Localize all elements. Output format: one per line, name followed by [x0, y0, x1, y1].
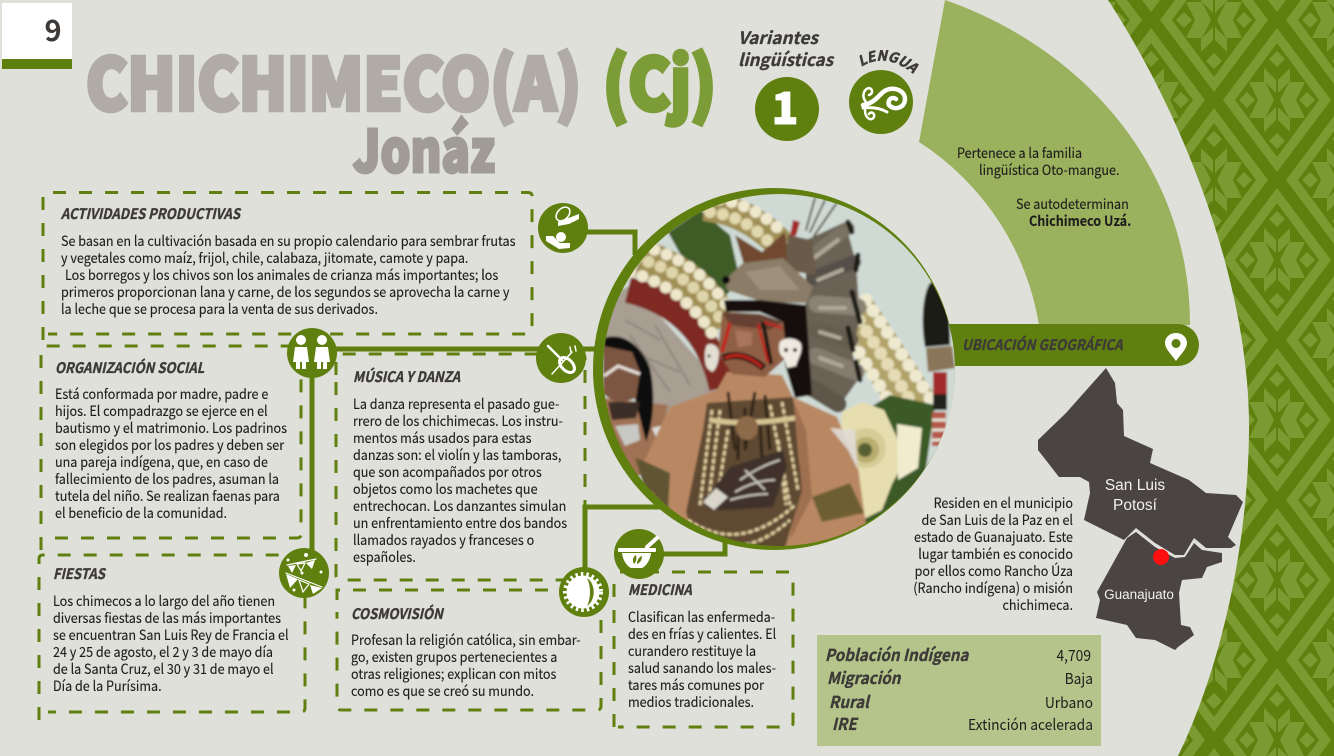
feathers [805, 198, 860, 408]
text block: rrero de los chichimecas. Los instru- [353, 410, 563, 430]
text block: de la Santa Cruz, el 30 y 31 de mayo el [53, 658, 274, 678]
language icon [849, 50, 919, 134]
stone wall [604, 286, 718, 416]
statistics box: Población Indígena [825, 642, 970, 666]
text block [55, 383, 287, 522]
text block: La danza representa el pasado gue- [353, 393, 559, 413]
page number tab: 9 [44, 8, 62, 50]
text block: como es que se creó su mundo. [351, 680, 534, 700]
text block [353, 393, 567, 566]
location marker [1153, 549, 1169, 565]
bead bib [686, 392, 802, 548]
text block: se encuentran San Luis Rey de Francia el [53, 624, 289, 644]
text block: bautismo y el matrimonio. Los padrinos [55, 417, 287, 437]
hair [724, 300, 812, 398]
language family text: lingüística Oto-mangue. [979, 159, 1119, 179]
panel: organización social [41, 328, 337, 550]
text block: Los chimecos a lo largo del año tienen [53, 590, 275, 610]
statistics box [817, 635, 1101, 746]
right corn column [852, 293, 934, 406]
icon: violin [536, 333, 586, 383]
corn arch [630, 246, 734, 340]
central dancer torso [640, 372, 866, 550]
geographic location bar: UBICACIÓN GEOGRÁFICA [962, 334, 1123, 355]
text block [351, 629, 581, 700]
heading: MEDICINA [628, 578, 692, 599]
page number tab [2, 3, 72, 69]
panel: medicina [614, 529, 793, 727]
text block [53, 590, 289, 695]
text block: una pareja indígena, que, en caso de [55, 451, 268, 471]
icon: mortar and pestle [614, 529, 664, 579]
text block [61, 230, 515, 318]
left dancer [603, 335, 668, 492]
linguistic variants [738, 24, 835, 141]
language family text [957, 142, 1131, 230]
location text: (Rancho indígena) o misión [913, 577, 1073, 597]
heading: FIESTAS [53, 562, 106, 583]
text block: el beneficio de la comunidad. [55, 502, 227, 522]
location text [913, 492, 1073, 614]
upper corn [704, 198, 786, 250]
location text: chichimeca. [1003, 594, 1073, 614]
icon: hands with crops [538, 203, 588, 253]
text block: curandero restituye la [628, 640, 756, 660]
connector lines [312, 232, 725, 575]
text block: go, existen grupos pertenecientes a [351, 646, 557, 666]
statistics box: 4,709 [1057, 644, 1091, 666]
language icon: LENGUA [859, 50, 919, 74]
text block: otras religiones; explican con mitos [351, 663, 556, 683]
text block: 24 y 25 de agosto, el 2 y 3 de mayo día [53, 641, 273, 661]
text block: danzas son: el violín y las tamboras, [353, 444, 561, 464]
heading: ACTIVIDADES PRODUCTIVAS [60, 202, 241, 223]
icon: sun and moon [559, 567, 609, 617]
statistics box: Rural [829, 689, 871, 713]
statistics box: IRE [832, 711, 859, 735]
map: San Luis Potosí and Guanajuato [1038, 368, 1243, 650]
text block: tares más comunes por [628, 674, 765, 694]
linguistic variants: Variantes [738, 24, 820, 49]
state labels [1104, 477, 1174, 602]
panel: actividades productivas [43, 192, 588, 340]
text block: medios tradicionales. [628, 691, 754, 711]
icon: two people [287, 328, 337, 378]
location text: de San Luis de la Paz en el [922, 509, 1073, 529]
eagle breastplate [703, 450, 787, 510]
title: Jonáz [353, 105, 495, 189]
text block: Está conformada por madre, padre e [55, 383, 268, 403]
statistics box: Baja [1065, 667, 1093, 689]
language family text: Pertenece a la familia [957, 142, 1082, 162]
location text: lugar también es conocido [918, 543, 1073, 563]
statistics box: Migración [827, 665, 901, 689]
text block: Se basan en la cultivación basada en su propio calendario para sembrar frutas [61, 230, 515, 250]
text block: Profesan la religión católica, sin embar- [351, 629, 581, 649]
text block: objetos como los machetes que [353, 478, 538, 498]
text block: entrechocan. Los danzantes simulan [353, 495, 566, 515]
state labels: Guanajuato [1104, 587, 1174, 602]
location text: Residen en el municipio [934, 492, 1073, 512]
staff at right [923, 282, 955, 446]
heading: ORGANIZACIÓN SOCIAL [55, 356, 204, 377]
face [718, 312, 787, 377]
heading: COSMOVISIÓN [351, 602, 444, 623]
panel: fiestas [39, 548, 329, 720]
title: CHICHIMECO(A) [86, 29, 581, 131]
woven textile pattern panel [1108, 0, 1334, 756]
title: (Cj) [603, 29, 716, 131]
text block: primeros proporcionan lana y carne, de los segundos se aprovecha la carne y [61, 281, 510, 301]
statistics box: Extinción acelerada [968, 713, 1093, 735]
text block: diversas fiestas de las más importantes [53, 607, 281, 627]
text block: mentos más usados para estas [353, 427, 531, 447]
text block: fallecimiento de los padres, asuman la [55, 468, 279, 488]
text block: Clasifican las enfermeda- [628, 606, 775, 626]
geographic location bar [940, 324, 1199, 366]
text block: llamados rayados y franceses o [353, 529, 534, 549]
moss [668, 210, 740, 300]
arm bands [812, 483, 864, 522]
red arch [628, 290, 722, 388]
text block: Los borregos y los chivos son los animales de crianza más importantes; los [65, 264, 498, 284]
panel: cosmovisión [337, 567, 609, 710]
icon: party banners [279, 548, 329, 598]
skull earrings [705, 338, 801, 372]
location text: estado de Guanajuato. Este [914, 526, 1073, 546]
location text: por ellos como Rancho Úza [915, 560, 1073, 580]
text block: y vegetales como maíz, frijol, chile, calabaza, jitomate, camote y papa. [61, 247, 468, 267]
state labels: Potosí [1113, 497, 1158, 514]
text block: españoles. [353, 546, 416, 566]
text block: des en frías y calientes. El [628, 623, 776, 643]
language family band [919, 0, 1190, 325]
panel: música y danza [336, 333, 586, 580]
language family text: Chichimeco Uzá. [1029, 210, 1131, 230]
text block: Día de la Purísima. [53, 675, 162, 695]
linguistic variants: 1 [772, 73, 798, 137]
text block: salud sanando los males- [628, 657, 776, 677]
photo circle: chichimeca dancers [593, 188, 960, 550]
text block [628, 606, 776, 711]
language family text: Se autodeterminan [1016, 193, 1129, 213]
statistics box: Urbano [1045, 691, 1093, 713]
text block: son elegidos por los padres y deben ser [55, 434, 285, 454]
fur headdress [722, 220, 816, 303]
foliage and flower [864, 394, 936, 524]
text block: un enfrentamiento entre dos bandos [353, 512, 567, 532]
text block: la leche que se procesa para la venta de sus derivados. [61, 298, 378, 318]
state labels: San Luis [1105, 477, 1165, 494]
text block: que son acompañados por otros [353, 461, 542, 481]
heading: MÚSICA Y DANZA [353, 365, 460, 386]
text block: tutela del niño. Se realizan faenas para [55, 485, 280, 505]
title [86, 29, 716, 189]
linguistic variants: lingüísticas [738, 46, 835, 71]
text block: hijos. El compadrazgo se ejerce en el [55, 400, 268, 420]
